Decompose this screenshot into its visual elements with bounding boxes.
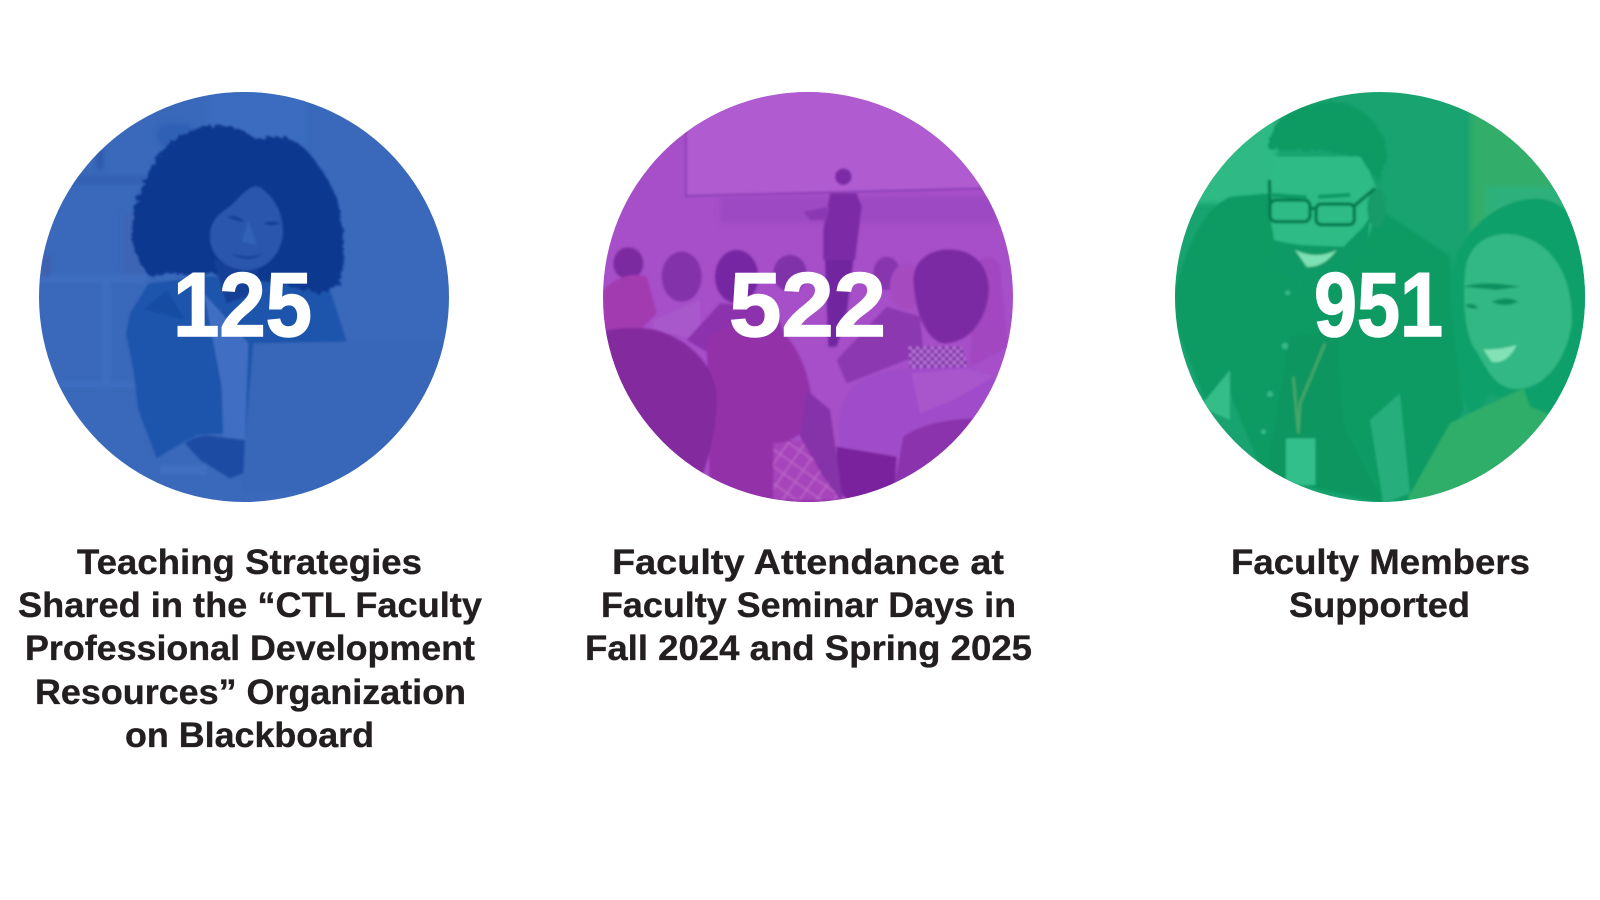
projection screen bbox=[687, 90, 1000, 195]
caption: teaching strategies: Professional Development bbox=[25, 629, 475, 668]
woman bbox=[1450, 198, 1590, 420]
statistic: 125: 125 bbox=[173, 255, 312, 356]
laptop bbox=[306, 342, 444, 492]
caption: teaching strategies: Teaching Strategies bbox=[77, 543, 422, 582]
photo: seminar audience in purple duotone bbox=[593, 90, 1013, 503]
caption: faculty members supported bbox=[1231, 543, 1530, 625]
photo: two colleagues in green duotone bbox=[1163, 90, 1590, 503]
panel: teaching strategies bbox=[18, 92, 483, 755]
hand and table bbox=[185, 436, 245, 478]
hair bbox=[131, 125, 343, 293]
audience back row bbox=[603, 247, 1008, 387]
panel: faculty attendance bbox=[585, 90, 1032, 668]
lanyard and badge bbox=[1293, 343, 1325, 433]
foreground head bbox=[593, 328, 717, 473]
caption: teaching strategies: Shared in the “CTL Faculty bbox=[18, 586, 483, 625]
statistic: 522: 522 bbox=[729, 255, 886, 356]
caption: faculty attendance: Faculty Attendance at bbox=[612, 543, 1004, 582]
jacket bbox=[126, 277, 347, 458]
buttons bbox=[1282, 343, 1288, 349]
woman shirt bbox=[1406, 388, 1549, 500]
caption: teaching strategies bbox=[18, 543, 483, 755]
caption: faculty attendance: Faculty Seminar Days in bbox=[601, 586, 1016, 625]
caption: teaching strategies: Resources” Organization bbox=[35, 673, 466, 712]
photo: woman at laptop in blue duotone bbox=[37, 92, 449, 502]
caption: faculty members supported: Supported bbox=[1289, 586, 1470, 625]
caption: faculty members supported: Faculty Members bbox=[1231, 543, 1530, 582]
panel: faculty members supported bbox=[1163, 90, 1590, 625]
caption: faculty attendance: Fall 2024 and Spring 2025 bbox=[585, 629, 1032, 668]
statistic: 951: 951 bbox=[1314, 255, 1443, 356]
man body bbox=[1175, 193, 1463, 503]
neck bbox=[213, 260, 260, 303]
man with checked collar bbox=[837, 249, 997, 503]
caption: teaching strategies: on Blackboard bbox=[125, 716, 374, 755]
face bbox=[210, 187, 283, 270]
woman with long hair bbox=[706, 337, 837, 502]
speaker bbox=[803, 168, 862, 347]
man head bbox=[1270, 154, 1377, 249]
glasses bbox=[1269, 180, 1375, 225]
caption: faculty attendance bbox=[585, 543, 1032, 668]
